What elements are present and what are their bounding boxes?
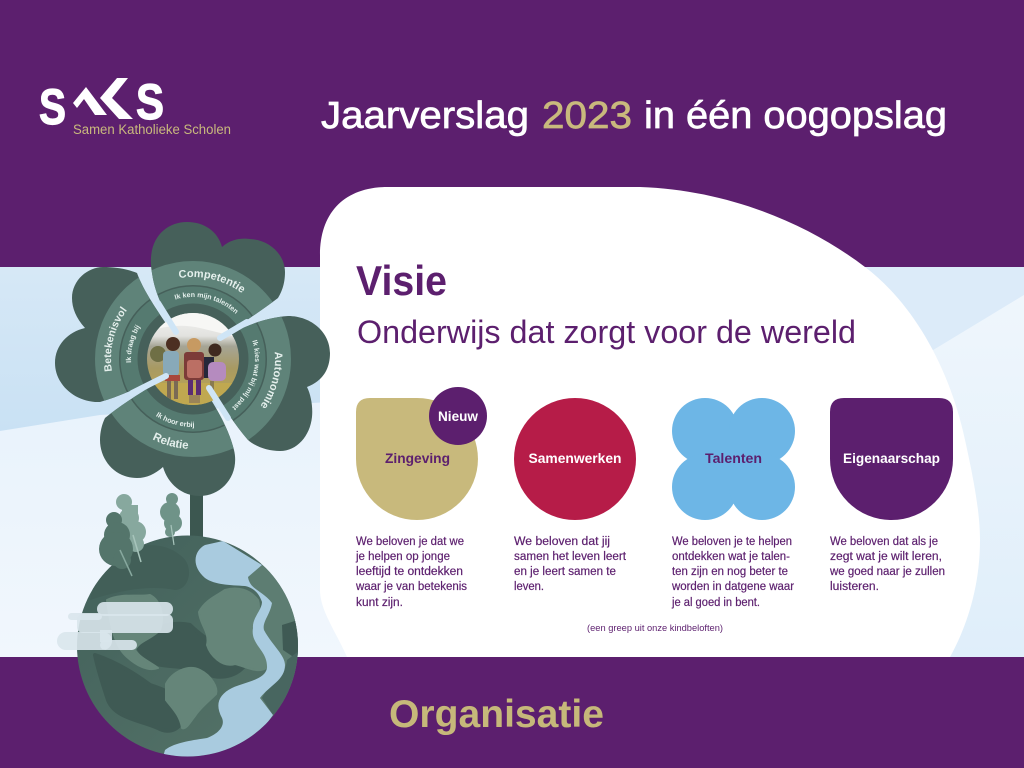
title: in één oogopslag: [644, 95, 947, 137]
label: Relatie: Relatie: [152, 432, 188, 449]
heading: Visie: Visie: [356, 257, 447, 304]
logo: SAKS: S: [136, 74, 164, 130]
text: Talenten belofte: worden in datgene waar: [671, 581, 794, 593]
text: Talenten belofte: ten zijn en nog beter te: [672, 566, 788, 578]
shape: Zingeving: [356, 398, 478, 520]
text: Eigenaarschap belofte: zegt wat je wilt leren,: [830, 551, 942, 563]
dark landmass: [95, 655, 183, 731]
label: Ik kies wat bij mij past: Ik kies wat bij mij past: [232, 340, 260, 410]
shape: Zingeving: Zingeving: [385, 450, 450, 466]
caption: (een greep uit onze kindbeloften): [587, 623, 723, 634]
shape: Eigenaarschap: Eigenaarschap: [843, 450, 940, 466]
text: Talenten belofte: je al goed in bent.: [671, 597, 760, 609]
text: Zingeving belofte: kunt zijn.: [356, 597, 403, 609]
text: Eigenaarschap belofte: We beloven dat als je: [830, 536, 938, 548]
region: east of river: [248, 565, 300, 715]
header band: [0, 0, 1024, 267]
text: Eigenaarschap belofte: luisteren.: [830, 581, 879, 593]
text: Zingeving belofte: waar je van betekenis: [355, 581, 467, 593]
continent: Africa: [199, 588, 266, 670]
title: 2023: [542, 95, 632, 137]
subheading: Onderwijs dat zorgt voor de wereld: [357, 314, 856, 350]
label: Ik ken mijn talenten: Ik ken mijn talenten: [174, 292, 238, 314]
text: Samenwerken belofte: samen het leven leert: [514, 551, 627, 563]
text: Zingeving belofte: [355, 536, 467, 609]
photo: children: [147, 313, 240, 405]
logo: SAKS: [39, 74, 231, 137]
text: Samenwerken belofte: en je leert samen te: [514, 566, 616, 578]
label: Betekenisvol: Betekenisvol: [104, 306, 127, 372]
badge: Nieuw: [429, 387, 487, 445]
background: light blue band: [0, 267, 1024, 657]
continent: South America: [166, 668, 216, 728]
dark band: north: [92, 566, 189, 590]
text: Zingeving belofte: We beloven je dat we: [356, 536, 464, 548]
text: Samenwerken belofte: [514, 536, 627, 593]
kid left: [163, 337, 180, 399]
footer band: [0, 657, 1024, 768]
label: Ik draag bij: Ik draag bij: [126, 324, 141, 362]
illustration: clover: [55, 222, 330, 496]
shape: Talenten: Talenten: [705, 450, 762, 466]
water: [163, 541, 285, 760]
logo: SAKS: Samen Katholieke Scholen: [73, 122, 231, 137]
text: Zingeving belofte: je helpen op jonge: [355, 551, 450, 563]
illustration: trees: [99, 493, 182, 576]
text: Talenten belofte: We beloven je te helpen: [672, 536, 792, 548]
text: Talenten belofte: ontdekken wat je talen-: [672, 551, 790, 563]
label: Autonomie: Autonomie: [261, 352, 282, 408]
dark band: central: [135, 624, 245, 677]
illustration: stem: [190, 480, 203, 540]
shape: Samenwerken: [514, 398, 636, 520]
title: [321, 95, 947, 137]
slit tips: [132, 303, 247, 418]
text: Samenwerken belofte: leven.: [514, 581, 544, 593]
shape: Talenten: [672, 398, 795, 520]
text: Eigenaarschap belofte: [829, 536, 945, 593]
title: Jaarverslag: [321, 95, 529, 137]
logo: SAKS: S: [39, 79, 66, 135]
illustration: globe: [77, 536, 300, 760]
text: Talenten belofte: [671, 536, 794, 609]
shape: Eigenaarschap: [830, 398, 953, 520]
text: Eigenaarschap belofte: we goed naar je zullen: [829, 566, 945, 578]
text: Samenwerken belofte: We beloven dat jij: [514, 536, 610, 548]
kid middle: [184, 338, 204, 403]
label: Ik hoor erbij: Ik hoor erbij: [156, 412, 194, 428]
cloud: [57, 602, 173, 650]
label: Competentie: Competentie: [179, 270, 244, 292]
kid right: [204, 344, 226, 393]
footer heading: Organisatie: Organisatie: [389, 693, 604, 736]
continent: North America: [107, 595, 162, 669]
shape: Samenwerken: Samenwerken: [528, 450, 622, 466]
badge: Nieuw: Nieuw: [438, 408, 478, 424]
panel: visie: [320, 187, 980, 657]
text: Zingeving belofte: leeftijd te ontdekken: [356, 566, 463, 578]
